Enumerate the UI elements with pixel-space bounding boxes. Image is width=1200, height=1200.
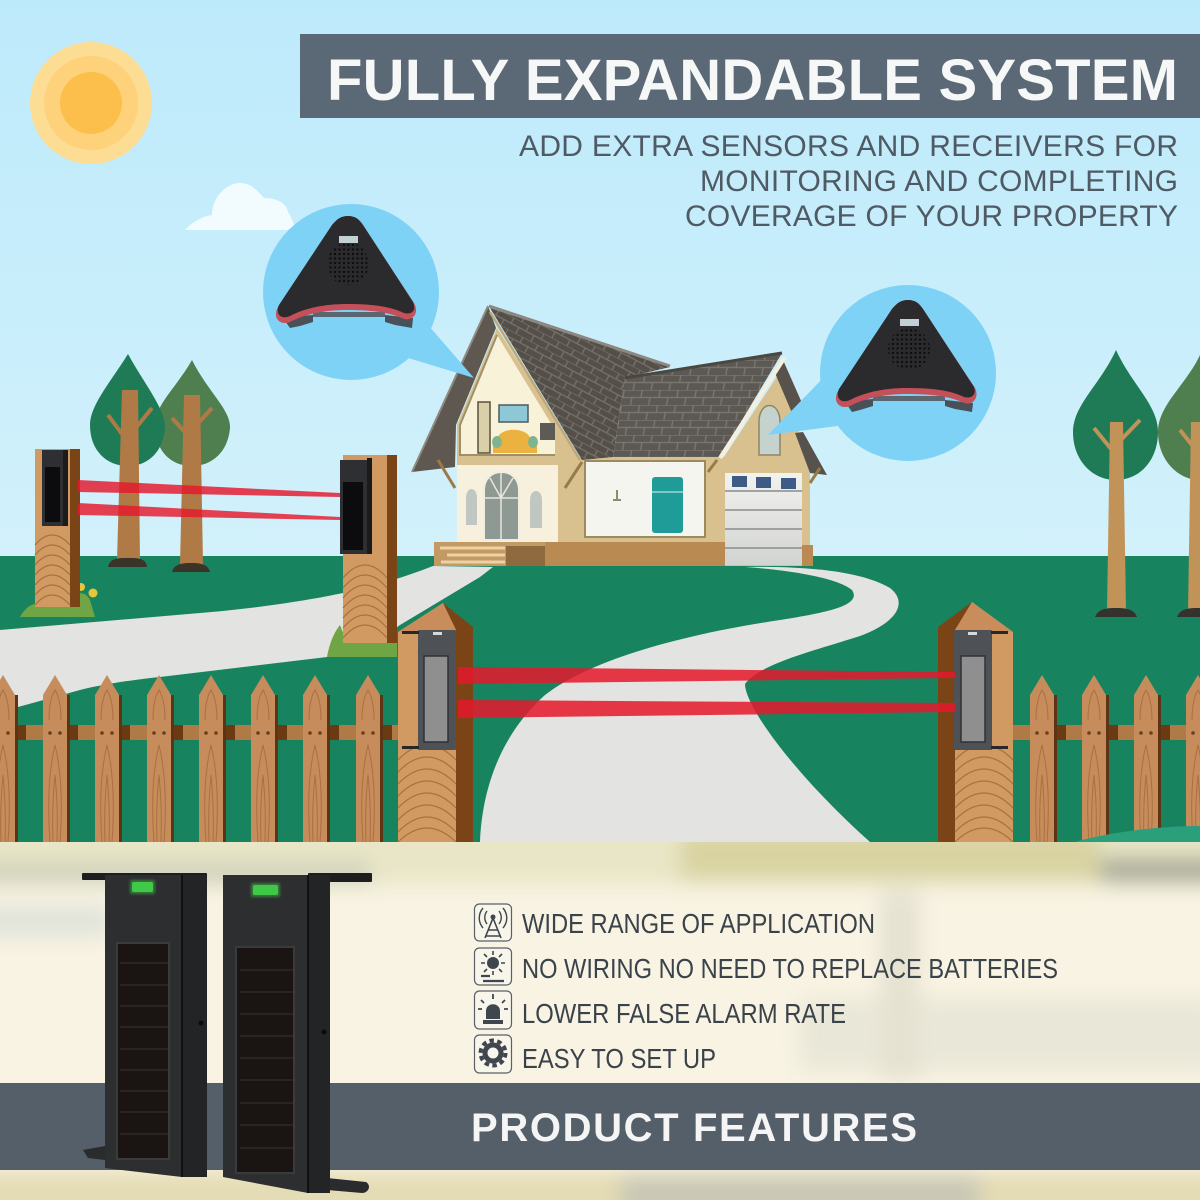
feature: easy set up: EASY TO SET UP bbox=[522, 1043, 716, 1074]
receiver feet bbox=[845, 399, 973, 412]
sofa bbox=[492, 430, 538, 453]
garage door bbox=[725, 473, 802, 565]
picture bbox=[499, 405, 528, 422]
grass and flowers at left post bbox=[20, 583, 98, 617]
walls bbox=[457, 457, 810, 566]
product features banner bbox=[0, 1083, 1200, 1170]
foundation bbox=[545, 542, 725, 566]
feature: no wiring bbox=[474, 948, 1058, 985]
picket fence right bbox=[1010, 675, 1200, 842]
cream upper room bbox=[457, 328, 582, 462]
receiver display bbox=[339, 236, 358, 243]
side windows bbox=[466, 489, 477, 525]
picket fence left bbox=[0, 675, 400, 842]
arched front door bbox=[484, 472, 519, 540]
receiver speaker grille bbox=[888, 328, 930, 370]
left rear gable roof bbox=[412, 306, 496, 472]
tree pair right bbox=[1073, 350, 1200, 617]
receiver face bbox=[278, 216, 414, 317]
feature: wide range bbox=[474, 904, 875, 941]
refrigerator bbox=[652, 477, 683, 533]
red sensor beams front bbox=[458, 667, 955, 718]
sky background bbox=[0, 0, 1200, 560]
receiver face bbox=[838, 300, 975, 401]
feature: lower false alarm: LOWER FALSE ALARM RATE bbox=[522, 998, 846, 1029]
subtitle text: COVERAGE OF YOUR PROPERTY bbox=[685, 200, 1178, 233]
icon: gear bbox=[474, 1035, 512, 1073]
product features banner: PRODUCT FEATURES bbox=[471, 1106, 917, 1150]
grass at right post bbox=[327, 625, 397, 657]
receiver base bbox=[313, 312, 385, 317]
faucet bbox=[613, 490, 621, 500]
product sensor unit left bbox=[82, 873, 207, 1177]
subtitle text: ADD EXTRA SENSORS AND RECEIVERS FOR bbox=[519, 130, 1178, 163]
title banner: FULLY EXPANDABLE SYSTEM bbox=[327, 48, 1178, 113]
feature: no wiring: NO WIRING NO NEED TO REPLACE BATTERIES bbox=[522, 953, 1058, 984]
house bbox=[412, 306, 827, 566]
receiver body red edge bbox=[276, 216, 416, 323]
large sensor post left bbox=[398, 603, 473, 842]
right gable eave bbox=[720, 357, 827, 475]
feature: easy set up bbox=[474, 1035, 716, 1074]
eave brackets bbox=[438, 460, 820, 488]
receiver feet bbox=[283, 315, 413, 328]
corner lawn accent bbox=[1075, 826, 1200, 842]
small sensor post right bbox=[340, 455, 397, 643]
blurred photo background bbox=[0, 826, 1200, 1200]
small sensor post left bbox=[35, 449, 80, 607]
front steps bbox=[434, 542, 545, 566]
icon: sun bbox=[30, 42, 152, 164]
shelf bbox=[478, 402, 490, 453]
feature: wide range: WIDE RANGE OF APPLICATION bbox=[522, 908, 875, 939]
gable arch window bbox=[759, 406, 780, 455]
icon: solar panel bbox=[474, 948, 512, 985]
kitchen window bbox=[585, 461, 705, 537]
driveway road bbox=[0, 566, 899, 842]
receiver body red edge bbox=[836, 300, 977, 407]
green lawn bbox=[0, 556, 1200, 842]
icon: antenna bbox=[474, 904, 512, 941]
tree pair left bbox=[90, 354, 230, 572]
receiver base bbox=[873, 396, 945, 401]
speech bubble right with receiver bbox=[768, 285, 996, 461]
feature: lower false alarm bbox=[474, 991, 846, 1029]
receiver speaker grille bbox=[327, 243, 369, 285]
large sensor post right bbox=[938, 602, 1013, 842]
icon: cloud bbox=[185, 183, 295, 230]
monitor bbox=[540, 423, 555, 440]
side roof bbox=[613, 353, 782, 457]
icon: alarm beacon bbox=[474, 991, 512, 1029]
red sensor beams back bbox=[78, 480, 340, 520]
main roof bbox=[490, 308, 670, 460]
speech bubble left with receiver bbox=[263, 204, 474, 380]
lower cream wall bbox=[457, 465, 558, 542]
receiver display bbox=[900, 319, 919, 326]
right gable wall bbox=[722, 372, 810, 470]
product sensor unit right bbox=[223, 873, 372, 1193]
subtitle text bbox=[519, 130, 1178, 233]
subtitle text: MONITORING AND COMPLETING bbox=[700, 165, 1178, 198]
